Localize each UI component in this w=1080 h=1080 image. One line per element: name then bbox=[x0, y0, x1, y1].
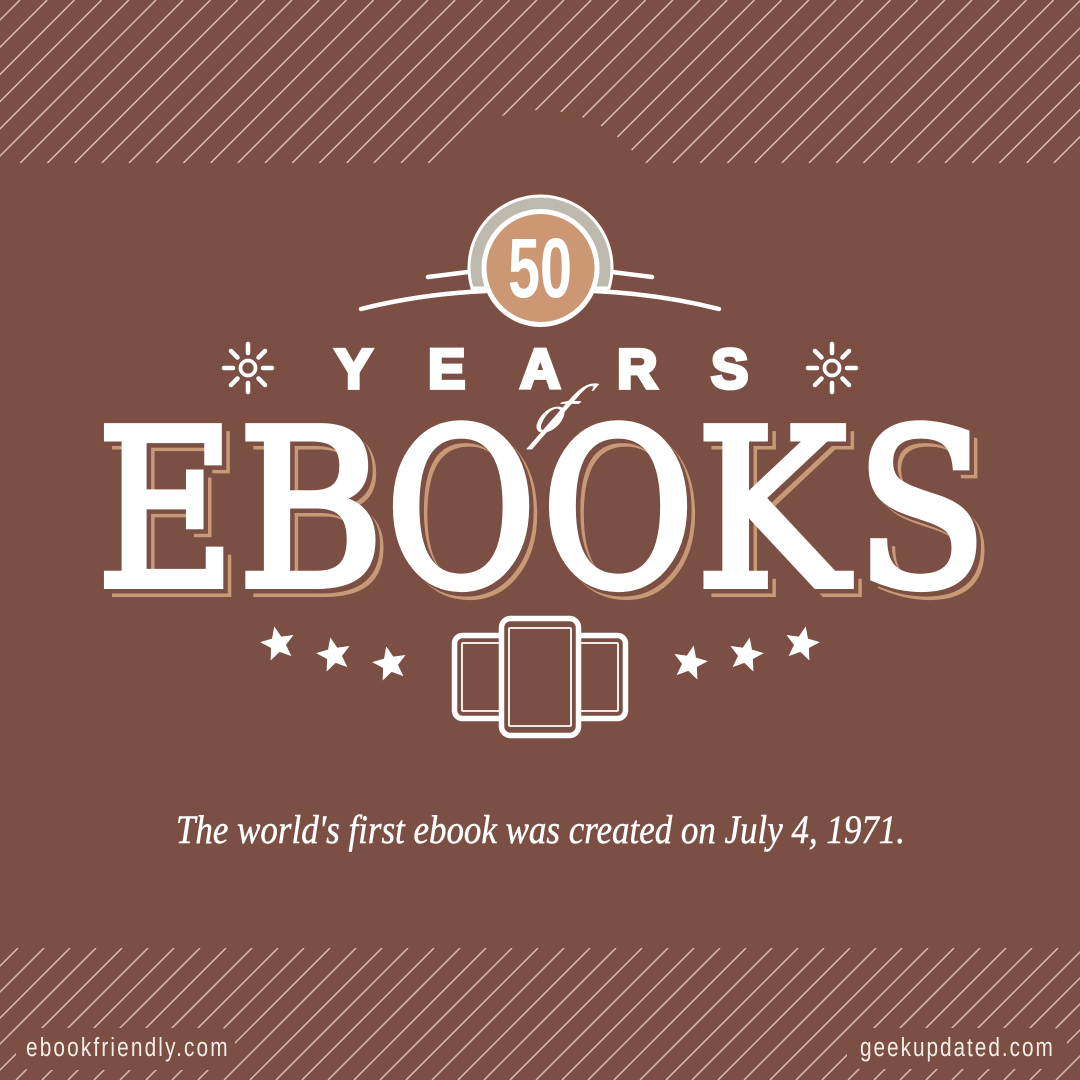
icon: left sun bbox=[224, 344, 272, 392]
heading: YEARS: Y bbox=[335, 337, 372, 400]
heading: YEARS bbox=[335, 337, 748, 400]
heading: EBOOKS shadow gap: O bbox=[546, 389, 699, 642]
stars: right bbox=[670, 623, 822, 681]
heading: EBOOKS: B bbox=[238, 384, 384, 638]
heading: EBOOKS shadow gap: E bbox=[101, 389, 240, 642]
heading: EBOOKS: O bbox=[542, 384, 694, 638]
heading: EBOOKS shadow gap: B bbox=[242, 389, 389, 642]
stars: left bbox=[258, 623, 410, 682]
heading: EBOOKS: S bbox=[856, 384, 988, 638]
heading: YEARS: E bbox=[428, 337, 465, 400]
script word: of: f bbox=[525, 370, 609, 450]
icon: right sun bbox=[808, 344, 856, 392]
heading: EBOOKS shadow gap: K bbox=[700, 389, 856, 642]
badge: 50 bbox=[361, 196, 719, 324]
curved lines bbox=[361, 272, 719, 309]
heading: EBOOKS shadow: O bbox=[550, 392, 702, 646]
heading: EBOOKS shadow: E bbox=[104, 392, 244, 646]
grey dome bbox=[469, 196, 612, 288]
heading: EBOOKS shadow gap: O bbox=[390, 389, 541, 642]
footer right: source: geekupdated.com bbox=[860, 1033, 1053, 1062]
icon: ereaders bbox=[454, 618, 626, 736]
tagline: The world's first ebook was created on July 4, 1971. bbox=[176, 807, 905, 852]
heading: YEARS: A bbox=[520, 337, 560, 400]
footer left: source: ebookfriendly.com bbox=[26, 1033, 228, 1062]
heading: YEARS: S bbox=[711, 337, 748, 400]
heading: YEARS: R bbox=[617, 337, 657, 400]
tan circle bbox=[484, 212, 597, 324]
heading: EBOOKS shadow gap: S bbox=[860, 389, 992, 642]
heading: EBOOKS shadow: S bbox=[864, 392, 996, 646]
heading: EBOOKS: K bbox=[696, 384, 851, 638]
heading: EBOOKS shadow: K bbox=[704, 392, 859, 646]
heading: EBOOKS shadow gap bbox=[101, 389, 992, 642]
heading: EBOOKS bbox=[96, 384, 988, 638]
number 50: 50 bbox=[508, 221, 572, 315]
heading: EBOOKS shadow: B bbox=[246, 392, 392, 646]
heading: EBOOKS shadow bbox=[104, 392, 996, 646]
heading: EBOOKS: O bbox=[386, 384, 536, 638]
script word: of: o bbox=[527, 385, 578, 444]
heading: EBOOKS shadow: O bbox=[394, 392, 544, 646]
heading: EBOOKS: E bbox=[96, 384, 236, 638]
